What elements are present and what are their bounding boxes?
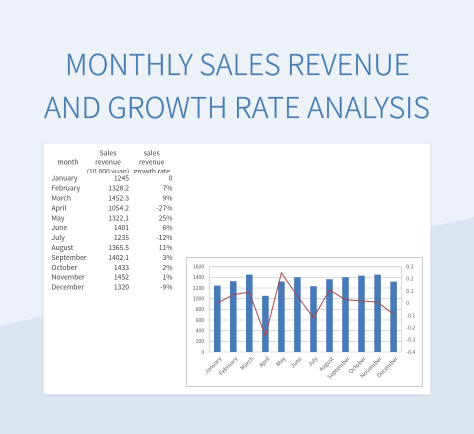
revenue column bbox=[108, 173, 129, 292]
revenue column: 1452 bbox=[114, 272, 129, 282]
growth rate column: 1% bbox=[162, 272, 172, 282]
revenue column: 1402.1 bbox=[108, 252, 129, 262]
table header bbox=[58, 150, 170, 173]
month column: August bbox=[52, 242, 74, 252]
table header: revenue bbox=[95, 157, 121, 167]
month column: April bbox=[52, 202, 66, 212]
left axis labels: 1600 bbox=[193, 264, 204, 270]
revenue column: 1320 bbox=[114, 282, 129, 292]
month axis labels: March bbox=[238, 355, 255, 372]
growth rate column: -9% bbox=[160, 282, 172, 292]
right axis labels: 0 bbox=[406, 300, 409, 307]
title: AND GROWTH RATE ANALYSIS bbox=[44, 85, 430, 127]
month axis labels: July bbox=[306, 355, 319, 368]
left axis labels: 400 bbox=[196, 328, 204, 334]
month column bbox=[52, 173, 87, 292]
left axis labels: 1200 bbox=[193, 285, 204, 292]
right axis labels: 0.3 bbox=[406, 264, 414, 270]
growth rate column: 9% bbox=[162, 192, 172, 202]
month axis labels: December bbox=[375, 354, 400, 379]
growth rate column: 2% bbox=[162, 262, 172, 272]
left axis labels bbox=[193, 264, 204, 356]
right axis labels: 0.2 bbox=[406, 276, 414, 283]
table header: month bbox=[57, 157, 79, 167]
table header: sales bbox=[144, 147, 160, 157]
left axis labels: 0 bbox=[201, 349, 204, 356]
growth rate column: 25% bbox=[159, 212, 172, 222]
left axis labels: 1000 bbox=[193, 296, 204, 302]
left axis labels: 1400 bbox=[193, 274, 204, 281]
month axis labels: June bbox=[289, 355, 303, 370]
table header: revenue bbox=[139, 157, 165, 167]
right axis labels: 0.1 bbox=[406, 288, 414, 295]
panel: spreadsheet card bbox=[44, 144, 430, 394]
left axis labels: 200 bbox=[196, 338, 204, 345]
month axis labels: October bbox=[347, 354, 368, 375]
revenue column: 1433 bbox=[114, 262, 129, 272]
line: growth rate bbox=[217, 273, 394, 336]
month column: September bbox=[52, 252, 87, 262]
growth rate column: 6% bbox=[162, 222, 172, 232]
revenue column: 1054.2 bbox=[108, 202, 129, 212]
month axis labels: November bbox=[358, 354, 384, 380]
right axis labels: -0.1 bbox=[406, 312, 415, 319]
table header: Sales bbox=[100, 147, 116, 157]
right axis labels bbox=[406, 264, 415, 356]
table header: growth rate bbox=[133, 166, 170, 176]
month column: February bbox=[52, 183, 81, 193]
title: MONTHLY SALES REVENUE bbox=[65, 42, 410, 84]
month axis labels: April bbox=[257, 354, 272, 369]
revenue column: 1328.2 bbox=[108, 183, 129, 193]
month column: May bbox=[52, 212, 65, 222]
growth rate column: -27% bbox=[156, 202, 172, 212]
combo chart bbox=[186, 258, 422, 386]
growth rate column: 7% bbox=[162, 183, 172, 193]
month axis labels: September bbox=[325, 354, 352, 381]
revenue column: 1452.3 bbox=[108, 192, 129, 202]
right axis labels: -0.2 bbox=[406, 324, 415, 332]
revenue column: 1322.1 bbox=[108, 212, 129, 222]
title bbox=[44, 42, 430, 127]
growth rate column: -12% bbox=[156, 232, 172, 242]
month axis labels: August bbox=[317, 354, 336, 373]
revenue column: 1365.5 bbox=[108, 242, 129, 252]
month axis labels bbox=[203, 354, 400, 381]
month column: December bbox=[52, 282, 84, 292]
right axis labels: -0.4 bbox=[406, 349, 415, 356]
month axis labels: January bbox=[203, 355, 223, 376]
month column: June bbox=[52, 222, 67, 232]
growth rate column: 3% bbox=[162, 252, 172, 262]
left axis labels: 600 bbox=[196, 317, 204, 324]
left axis labels: 800 bbox=[196, 306, 204, 313]
data table bbox=[52, 147, 173, 292]
revenue column: 1235 bbox=[114, 232, 129, 242]
growth rate column: 0 bbox=[169, 173, 173, 183]
month axis labels: May bbox=[274, 355, 287, 368]
month column: March bbox=[52, 192, 71, 202]
revenue column: 1245 bbox=[114, 173, 129, 183]
growth rate column: 11% bbox=[159, 242, 172, 252]
month column: July bbox=[52, 232, 65, 242]
month column: January bbox=[52, 173, 78, 183]
right axis labels: -0.3 bbox=[406, 337, 415, 344]
month column: November bbox=[52, 272, 85, 282]
bars: monthly revenue bbox=[214, 275, 397, 352]
month axis labels: February bbox=[217, 355, 239, 377]
revenue column: 1401 bbox=[114, 222, 129, 232]
table header: (10,000 yuan) bbox=[87, 166, 129, 176]
month column: October bbox=[52, 262, 77, 272]
growth rate column bbox=[156, 173, 173, 292]
